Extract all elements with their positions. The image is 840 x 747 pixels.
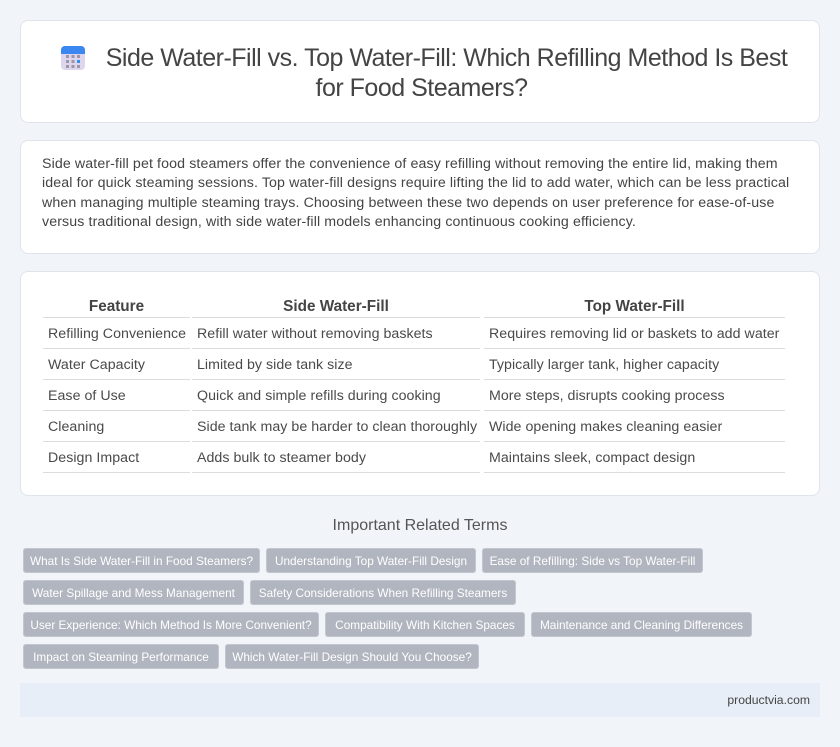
comparison table	[43, 298, 785, 473]
intro paragraph: versus traditional design, with side water-fill models enhancing continuous cooking efficiency.	[42, 214, 636, 230]
footer bar	[20, 683, 820, 717]
footer site name: productvia.com	[727, 693, 810, 707]
comparison table: Top Water-Fill	[584, 298, 685, 315]
related term tags: Understanding Top Water-Fill Design	[275, 554, 467, 568]
comparison table: Cleaning	[48, 419, 104, 435]
related term tags: User Experience: Which Method Is More Convenient?	[30, 618, 312, 632]
related term tags: What Is Side Water-Fill in Food Steamers?	[30, 554, 253, 568]
comparison table: Maintains sleek, compact design	[489, 450, 695, 466]
comparison table: Refilling Convenience	[48, 326, 186, 342]
comparison table: Side tank may be harder to clean thoroughly	[197, 419, 477, 435]
related term tags	[23, 548, 752, 669]
heading: related terms: Important Related Terms	[333, 517, 507, 534]
related term tags: Safety Considerations When Refilling Steamers	[259, 586, 507, 600]
panel: intro text card	[20, 140, 820, 254]
comparison table: Feature	[89, 298, 144, 315]
related term tags: Maintenance and Cleaning Differences	[540, 618, 743, 632]
comparison table: Side Water-Fill	[283, 298, 389, 315]
intro paragraph: when managing multiple steaming trays. Choosing between these two depends on user preference for ease-of-use	[42, 195, 774, 211]
comparison table: Quick and simple refills during cooking	[197, 388, 441, 404]
related term tags: Water Spillage and Mess Management	[32, 586, 235, 600]
related term tags: Which Water-Fill Design Should You Choose?	[232, 650, 472, 664]
comparison table: Refill water without removing baskets	[197, 326, 433, 342]
comparison table: Requires removing lid or baskets to add water	[489, 326, 779, 342]
comparison table: Typically larger tank, higher capacity	[489, 357, 719, 373]
title: for Food Steamers?	[316, 74, 527, 102]
icon: calendar	[61, 46, 85, 70]
related term tags: Impact on Steaming Performance	[33, 650, 209, 664]
comparison table: Limited by side tank size	[197, 357, 353, 373]
related term tags: Ease of Refilling: Side vs Top Water-Fill	[490, 554, 695, 568]
comparison table: Design Impact	[48, 450, 139, 466]
comparison table: Adds bulk to steamer body	[197, 450, 366, 466]
comparison table: More steps, disrupts cooking process	[489, 388, 725, 404]
panel: title card	[20, 20, 820, 123]
intro paragraph: Side water-fill pet food steamers offer the convenience of easy refilling without removing the entire lid, making them	[42, 156, 778, 172]
panel: comparison table card	[20, 271, 820, 496]
intro paragraph	[42, 156, 789, 230]
comparison table: Ease of Use	[48, 388, 126, 404]
related term tags: Compatibility With Kitchen Spaces	[335, 618, 515, 632]
intro paragraph: ideal for quick steaming sessions. Top water-fill designs require lifting the lid to add water, which can be less practical	[42, 175, 789, 191]
title	[106, 44, 788, 102]
title: Side Water-Fill vs. Top Water-Fill: Which Refilling Method Is Best	[106, 44, 787, 72]
comparison table: Wide opening makes cleaning easier	[489, 419, 722, 435]
comparison table: Water Capacity	[48, 357, 145, 373]
